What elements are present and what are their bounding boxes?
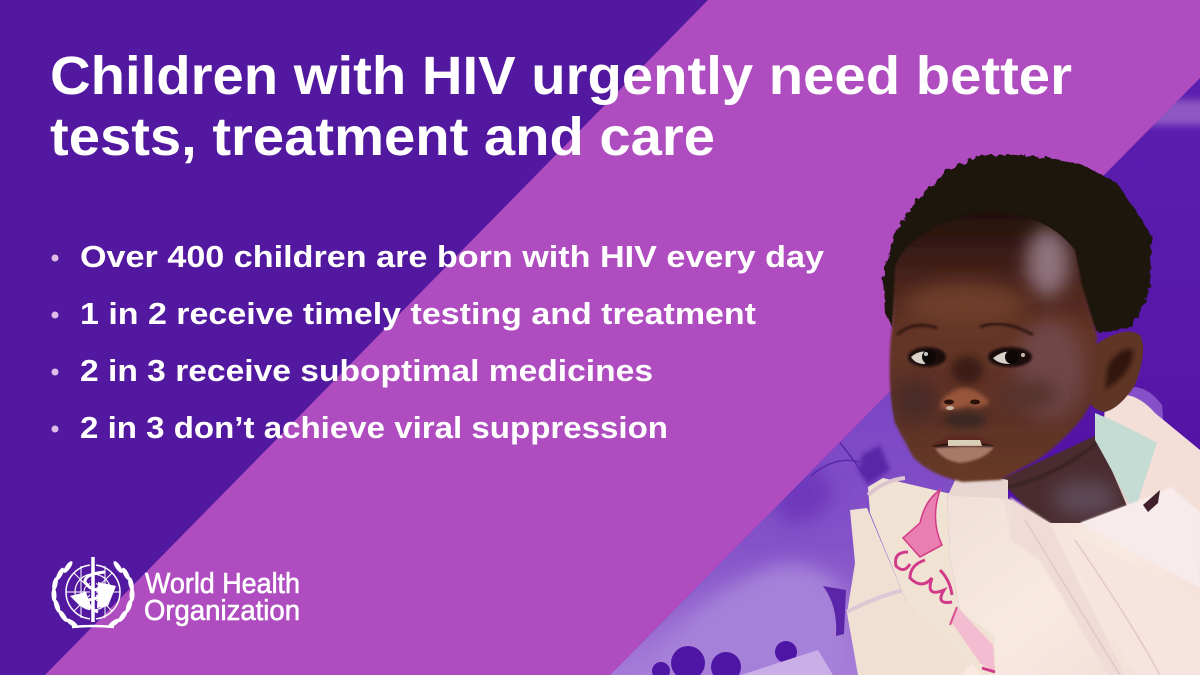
ear xyxy=(1090,332,1143,412)
bullet list xyxy=(52,239,825,445)
title: Children with HIV urgently need better xyxy=(50,46,1072,106)
title xyxy=(50,46,1072,167)
wordmark: Organization xyxy=(144,595,300,627)
mouth xyxy=(932,435,995,463)
hair xyxy=(883,155,1152,333)
nose xyxy=(940,388,990,410)
title: tests, treatment and care xyxy=(50,107,715,167)
emblem staff and serpent xyxy=(85,557,105,622)
face xyxy=(890,213,1097,482)
bullet: births: Over 400 children are born with HIV every day xyxy=(80,239,825,274)
bullet: medicines: 2 in 3 receive suboptimal medicines xyxy=(80,353,653,388)
bullet: testing: 1 in 2 receive timely testing and treatment xyxy=(80,296,756,331)
eyes xyxy=(908,347,1032,367)
icon: WHO emblem xyxy=(51,557,135,629)
dark gap with magenta strap xyxy=(1143,490,1160,512)
photo: child on purple blanket xyxy=(600,70,1200,675)
collar: pale green lining xyxy=(1095,413,1157,513)
shirt: front body xyxy=(947,487,1200,675)
emblem laurel wreath xyxy=(51,560,135,629)
emblem continents xyxy=(70,582,116,610)
shirt: back sleeve xyxy=(847,508,987,675)
shirt: cream garment xyxy=(847,470,1200,675)
shirt: pink printed flap xyxy=(868,478,995,675)
logo: World Health Organization xyxy=(51,557,300,629)
garment behind the right shoulder xyxy=(1104,395,1200,513)
eyebrows xyxy=(897,324,1033,335)
neck and chest xyxy=(1000,435,1135,530)
emblem globe xyxy=(66,565,120,619)
wordmark: World Health xyxy=(145,568,300,600)
background: dark purple diagonal panel xyxy=(0,0,708,675)
photo background: purple blanket xyxy=(600,385,1165,675)
wordmark xyxy=(144,568,300,627)
photo background: purple wall xyxy=(600,70,1200,675)
bullet: suppression: 2 in 3 don’t achieve viral suppression xyxy=(80,410,668,445)
emblem wreath ribbon xyxy=(72,626,114,627)
